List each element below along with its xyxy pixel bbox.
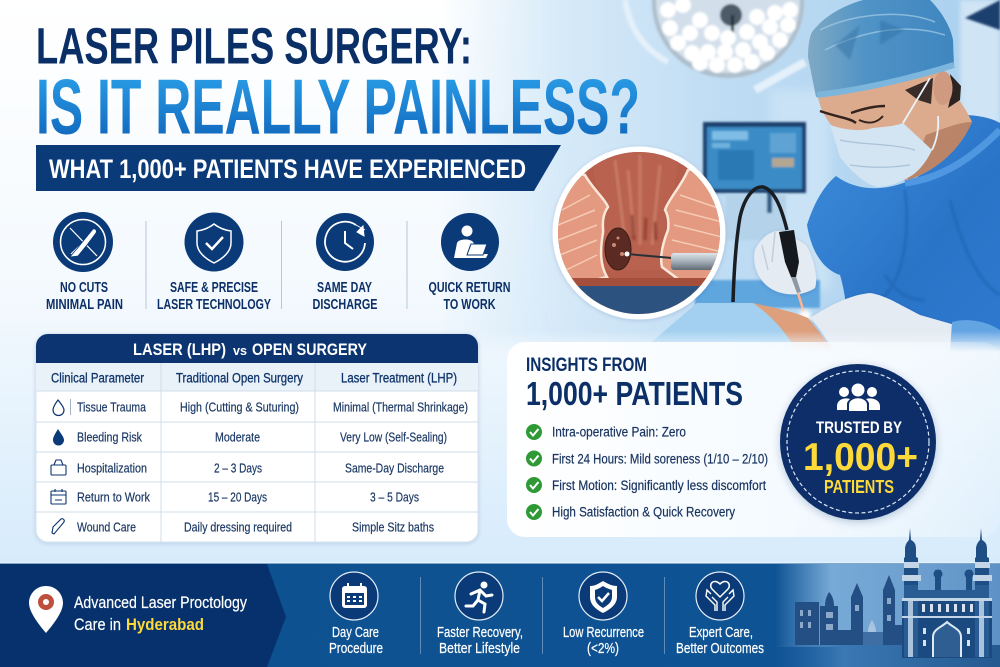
insight item 1: Intra-operative Pain: Zero	[552, 424, 686, 440]
label: same day discharge	[312, 280, 378, 313]
icon: map pin	[29, 586, 63, 633]
minarets	[904, 528, 918, 585]
label: quick return: QUICK RETURN	[428, 280, 510, 296]
city buildings	[795, 575, 907, 645]
gown	[807, 115, 1000, 352]
label: quick return	[428, 280, 510, 313]
surgical light	[625, 0, 805, 90]
footer item: faster recovery: Better Lifestyle	[439, 641, 520, 657]
badge: trusted by 1,000+ patients: 1,000+	[803, 436, 918, 479]
comparison table panel	[36, 334, 478, 542]
label: same day discharge: DISCHARGE	[312, 297, 378, 313]
label: no cuts: NO CUTS	[60, 280, 108, 296]
badge: trusted by 1,000+ patients	[780, 364, 936, 520]
footer item: day care: Day Care	[332, 625, 379, 641]
label: safe and precise: SAFE & PRECISE	[170, 280, 258, 296]
icon: safety shield	[184, 212, 244, 272]
insight item 2: First 24 Hours: Mild soreness (1/10 – 2/10)	[552, 452, 768, 466]
right hand glove	[810, 293, 955, 352]
row: bleeding risk: Very Low (Self-Sealing)	[340, 430, 447, 444]
footer item: low recurrence: (<2%)	[587, 641, 619, 657]
left hand glove	[754, 231, 816, 294]
footer location panel	[0, 564, 286, 667]
row: bleeding risk: Moderate	[215, 430, 260, 444]
footer item: expert care: Expert Care,	[689, 625, 753, 641]
cap	[808, 0, 954, 97]
insights heading	[526, 354, 743, 412]
heading line 1: LASER PILES SURGERY:	[36, 18, 472, 74]
label: no cuts	[46, 280, 123, 313]
title	[36, 18, 640, 150]
illustration: Hyderabad skyline and Charminar	[775, 528, 1000, 667]
row: bleeding risk: Bleeding Risk	[77, 430, 142, 444]
footer item: day care	[329, 572, 383, 657]
row: tissue trauma: High (Cutting & Suturing)	[180, 400, 299, 414]
label: quick return: TO WORK	[444, 297, 496, 313]
laser probe	[627, 254, 672, 258]
table heading: OPEN SURGERY	[252, 341, 367, 359]
footer location panel: Hyderabad	[126, 616, 204, 634]
row: return to work	[51, 489, 419, 504]
table column headings: Traditional Open Surgery	[176, 370, 303, 386]
table column headings: Laser Treatment (LHP)	[341, 370, 457, 386]
footer item: expert care: Better Outcomes	[676, 641, 764, 657]
row: bleeding risk	[53, 429, 447, 446]
row: tissue trauma: Minimal (Thermal Shrinkage)	[333, 400, 468, 414]
footer item: faster recovery	[437, 572, 523, 657]
table column headings: Clinical Parameter	[51, 370, 144, 386]
benefits row	[46, 212, 510, 313]
panel: patient insights	[507, 342, 1000, 537]
insights heading: INSIGHTS FROM	[526, 354, 647, 376]
table heading: LASER (LHP)	[133, 341, 226, 359]
footer location panel: Care in	[74, 616, 121, 634]
photo: operating room with surgeon	[440, 0, 1000, 352]
row: return to work: Return to Work	[77, 490, 150, 504]
label: no cuts: MINIMAL PAIN	[46, 297, 123, 313]
label: same day discharge: SAME DAY	[317, 280, 372, 296]
right fan	[661, 165, 725, 282]
cable and handpiece	[733, 187, 787, 302]
footer item: low recurrence	[563, 572, 644, 657]
inset illustration: anatomy	[552, 146, 726, 326]
row: hospitalization	[51, 460, 444, 476]
drape and skin	[652, 303, 790, 342]
left fan	[555, 170, 608, 285]
row: tissue trauma: Tissue Trauma	[77, 400, 147, 414]
row: wound care: Wound Care	[77, 520, 136, 534]
badge: trusted by 1,000+ patients: TRUSTED BY	[816, 418, 903, 437]
row: tissue trauma	[53, 399, 468, 416]
row: hospitalization: Same-Day Discharge	[345, 460, 444, 476]
footer item: day care: Procedure	[329, 641, 383, 657]
monitor	[695, 122, 820, 308]
neck and face	[818, 70, 972, 180]
row: return to work: 15 – 20 Days	[208, 490, 267, 504]
icon: clock	[316, 213, 374, 271]
subtitle banner: WHAT 1,000+ PATIENTS HAVE EXPERIENCED	[49, 154, 526, 184]
icon: people	[837, 384, 880, 411]
footer band	[0, 562, 1000, 667]
insight item 3: First Motion: Significantly less discomfort	[552, 478, 766, 493]
Charminar	[902, 528, 992, 658]
hemorrhoid lump	[605, 228, 631, 270]
icon: no cuts scalpel	[53, 212, 113, 272]
icon: person at laptop	[441, 213, 499, 271]
heading line 2: IS IT REALLY PAINLESS?	[36, 62, 640, 150]
label: safe and precise	[157, 280, 271, 313]
table column headings	[51, 370, 457, 386]
insight item 4: High Satisfaction & Quick Recovery	[552, 504, 735, 520]
row: hospitalization: 2 – 3 Days	[214, 460, 262, 476]
row: return to work: 3 – 5 Days	[370, 490, 419, 504]
badge: trusted by 1,000+ patients: PATIENTS	[824, 477, 894, 497]
footer item: low recurrence: Low Recurrence	[563, 625, 644, 641]
row: wound care: Daily dressing required	[184, 520, 292, 534]
footer location panel: Advanced Laser Proctology	[74, 594, 248, 612]
row: wound care	[52, 519, 434, 534]
subtitle banner	[36, 145, 561, 191]
insights heading: 1,000+ PATIENTS	[526, 375, 743, 412]
footer item: faster recovery: Faster Recovery,	[437, 625, 523, 641]
footer item: expert care	[676, 572, 764, 657]
label: safe and precise: LASER TECHNOLOGY	[157, 297, 271, 313]
row: hospitalization: Hospitalization	[77, 460, 147, 476]
table heading	[133, 341, 367, 359]
mask	[830, 123, 932, 187]
surgeon	[640, 0, 1000, 352]
table heading: vs	[233, 343, 247, 358]
row: wound care: Simple Sitz baths	[352, 520, 434, 534]
